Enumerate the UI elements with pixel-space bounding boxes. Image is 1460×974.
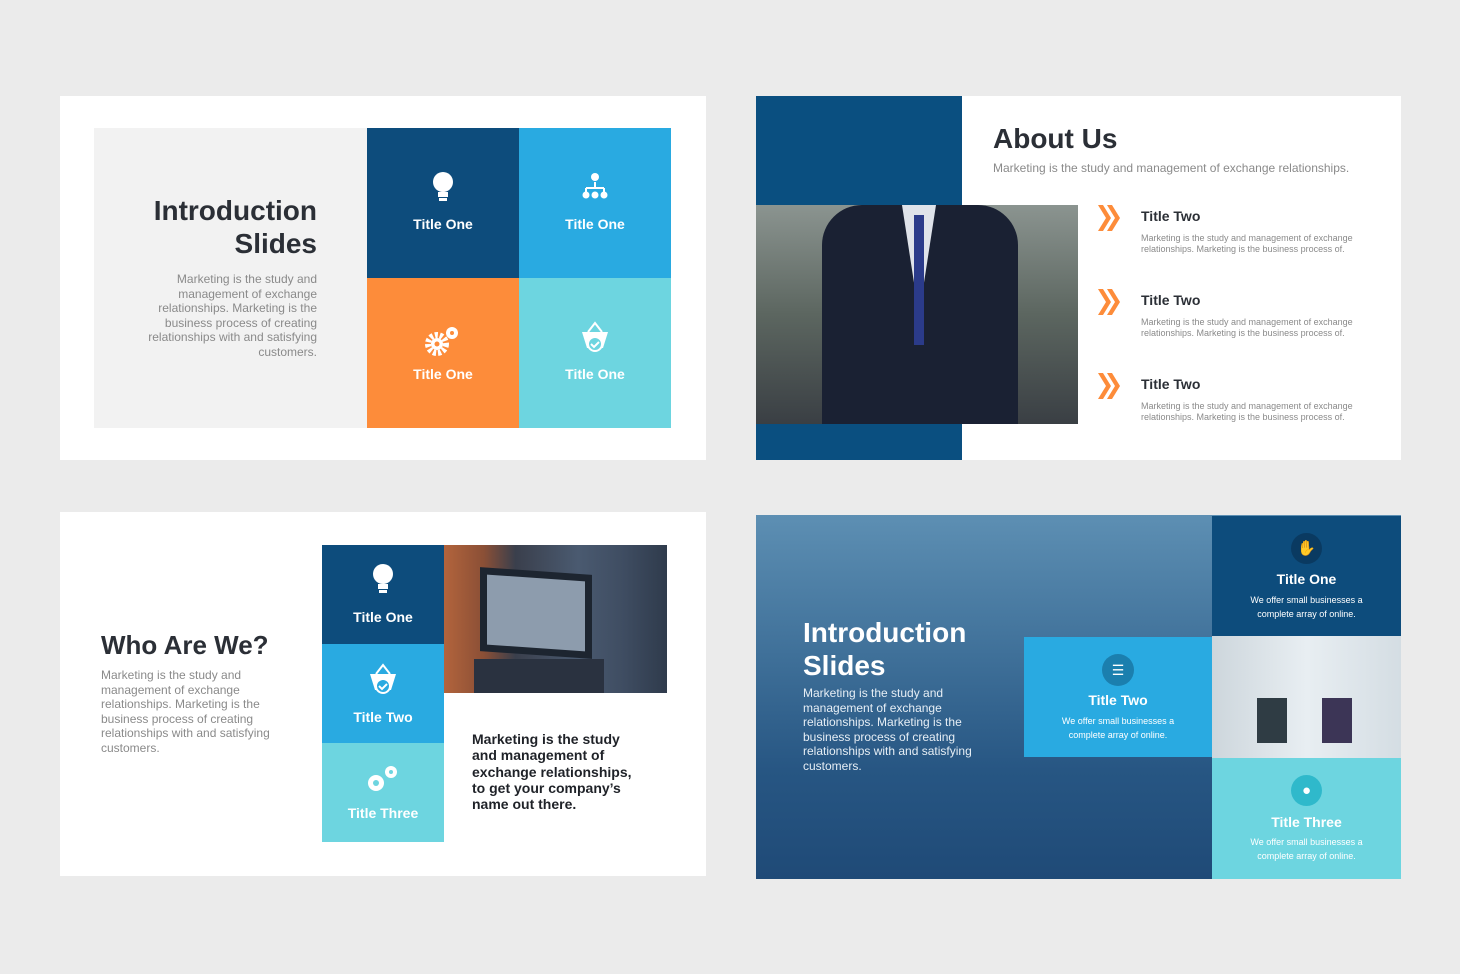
tile: title one dark: Title One [413,216,473,232]
photo: laptop [444,545,667,693]
tile: title three [322,743,444,842]
slide: who are we (bottom-left) [60,512,706,876]
dark blue bar [756,96,962,460]
icon: bulb [373,564,393,593]
icon: chevrons [1098,373,1120,399]
paragraph: Marketing is the study and management of exchange relationships. Marketing is the business process of creating relationships with and satisfying customers. [101,668,270,755]
slide: about us (top-right) [756,96,1401,460]
tile: title one light blue [519,128,671,278]
text: marketing statement: Marketing is the study and management of exchange relationships, to get your company’s name out there. [472,731,632,812]
icon circle: ☰ [1112,662,1124,678]
tile: title three: Title Three [1271,814,1342,830]
item 3: Marketing is the study and management of exchange relationships. Marketing is the business process of. [1141,401,1353,422]
icon: basket check [582,322,608,352]
tile: title one [322,545,444,644]
icon: bulb [433,172,453,201]
tile: title one [1212,516,1401,636]
icon: chevrons [1098,289,1120,315]
heading: Introduction [803,617,966,648]
tile: title three: We offer small businesses a complete array of online. [1250,837,1363,861]
tile: title two: We offer small businesses a complete array of online. [1062,716,1174,740]
heading [154,195,317,259]
tile: title one: Title One [1277,571,1336,587]
tile: title one dark [367,128,519,278]
icon circle [1102,654,1134,686]
icon circle: ● [1302,782,1311,799]
tile: title one: Title One [353,609,413,625]
tile: title two [1024,637,1212,757]
icon: basket check [370,664,396,694]
tile: title one light blue: Title One [565,216,625,232]
tile: title one teal: Title One [565,366,625,382]
heading [803,617,966,681]
photo: meeting [1212,636,1401,758]
tile: title one orange: Title One [413,366,473,382]
item 2: Marketing is the study and management of exchange relationships. Marketing is the business process of. [1141,317,1353,338]
icon: gears [368,766,397,791]
icon circle [1291,775,1322,806]
heading: Slides [803,650,885,681]
heading: Who Are We? [101,630,269,660]
tile: title two [322,644,444,743]
tile: title three [1212,758,1401,879]
item 3 [1098,373,1353,422]
tile: title two: Title Two [1088,692,1148,708]
icon: chevrons [1098,205,1120,231]
tile: title one: We offer small businesses a complete array of online. [1250,595,1363,619]
icon circle: ✋ [1297,540,1316,557]
heading: Introduction [154,195,317,226]
subtitle: Marketing is the study and management of exchange relationships. [993,161,1349,175]
item 2 [1098,289,1353,338]
item 1: Title Two [1141,208,1200,224]
slide: introduction slides city (bottom-right) [756,515,1401,879]
tile: title three: Title Three [348,805,418,821]
heading: about us: About Us [993,123,1117,154]
tile: title two: Title Two [353,709,413,725]
item 1: Marketing is the study and management of exchange relationships. Marketing is the business process of. [1141,233,1353,254]
icon: gears [425,327,458,356]
slide: introduction slides (top-left) [60,96,706,460]
gray text panel [94,128,367,428]
photo: businessman [756,205,1078,424]
icon: hierarchy [582,173,608,198]
item 3: Title Two [1141,376,1200,392]
heading: Slides [235,228,317,259]
tile: title one teal [519,278,671,428]
tile: title one orange [367,278,519,428]
item 2: Title Two [1141,292,1200,308]
paragraph: Marketing is the study and management of exchange relationships. Marketing is the business process of creating relationships with and satisfying customers. [803,686,972,773]
item 1 [1098,205,1353,254]
paragraph: Marketing is the study and management of exchange relationships. Marketing is the business process of creating relationships with and satisfying customers. [148,272,317,359]
icon circle [1291,533,1322,564]
